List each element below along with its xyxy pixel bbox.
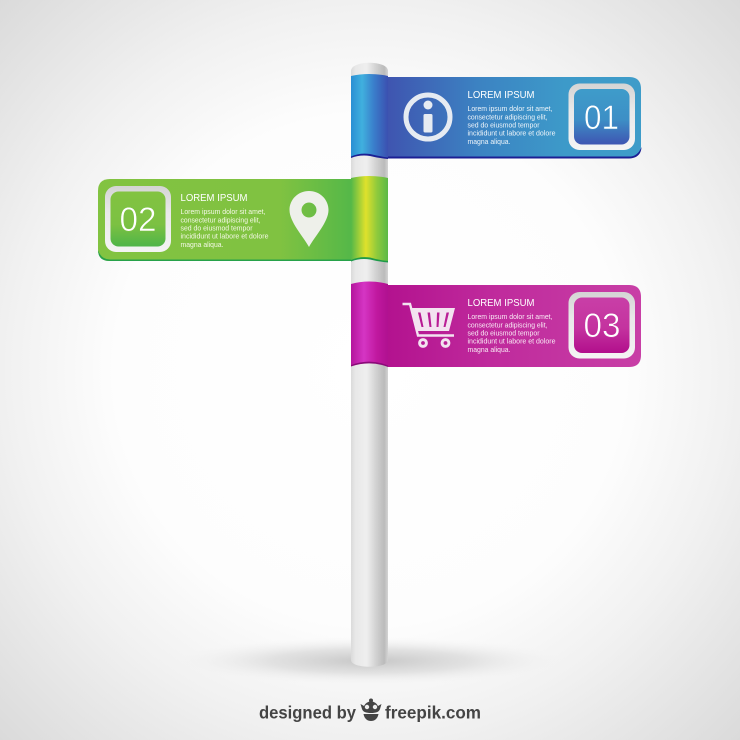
icon: map pin	[290, 191, 328, 247]
panel: sign 02 green	[98, 176, 388, 262]
number box 01: 01	[584, 99, 619, 137]
footer credit: designed by	[259, 702, 356, 722]
heading 01: LOREM IPSUM	[468, 89, 534, 101]
text block 03: consectetur adipiscing elit,	[468, 320, 548, 330]
heading 02: LOREM IPSUM	[180, 192, 248, 204]
text block 01: Lorem ipsum dolor sit amet,	[468, 104, 552, 113]
text block 03: magna aliqua.	[468, 345, 510, 354]
text block 02: sed do eiusmod tempor	[180, 224, 253, 232]
blue pole wrap	[351, 74, 388, 158]
text block 03: Lorem ipsum dolor sit amet,	[468, 312, 552, 321]
text block 02: magna aliqua.	[180, 240, 224, 249]
number box 02: 02	[120, 201, 156, 239]
text block 02: consectetur adipiscing elit,	[180, 216, 260, 224]
text block 01: consectetur adipiscing elit,	[468, 112, 548, 122]
heading 03: LOREM IPSUM	[468, 297, 534, 309]
icon: freepik mascot	[360, 698, 382, 721]
pole	[351, 63, 388, 667]
text block 03: sed do eiusmod tempor	[468, 328, 540, 338]
number box 01	[568, 84, 635, 150]
footer credit	[259, 698, 481, 722]
ground shadow	[170, 637, 570, 685]
footer credit: freepik.com	[385, 702, 481, 722]
text block 02: Lorem ipsum dolor sit amet,	[180, 207, 266, 216]
text block 03: incididunt ut labore et dolore	[468, 336, 556, 346]
icon: info	[406, 95, 450, 139]
icon: shopping cart	[402, 304, 455, 346]
text block 01	[468, 104, 556, 146]
text block 02: incididunt ut labore et dolore	[180, 232, 268, 240]
magenta banner	[388, 285, 641, 367]
text block 01: incididunt ut labore et dolore	[468, 128, 556, 138]
magenta pole wrap	[351, 282, 388, 366]
text block 03	[468, 312, 556, 354]
panel: sign 03 magenta	[351, 282, 641, 367]
text block 01: magna aliqua.	[468, 137, 510, 146]
green pole wrap	[351, 176, 388, 262]
number box 03: 03	[584, 307, 620, 345]
text block 02	[180, 207, 268, 249]
green banner	[98, 179, 351, 261]
text block 01: sed do eiusmod tempor	[468, 120, 540, 130]
number box 02	[105, 186, 171, 252]
panel: sign 01 blue	[351, 74, 642, 159]
blue banner	[388, 77, 641, 158]
number box 03	[568, 292, 635, 358]
